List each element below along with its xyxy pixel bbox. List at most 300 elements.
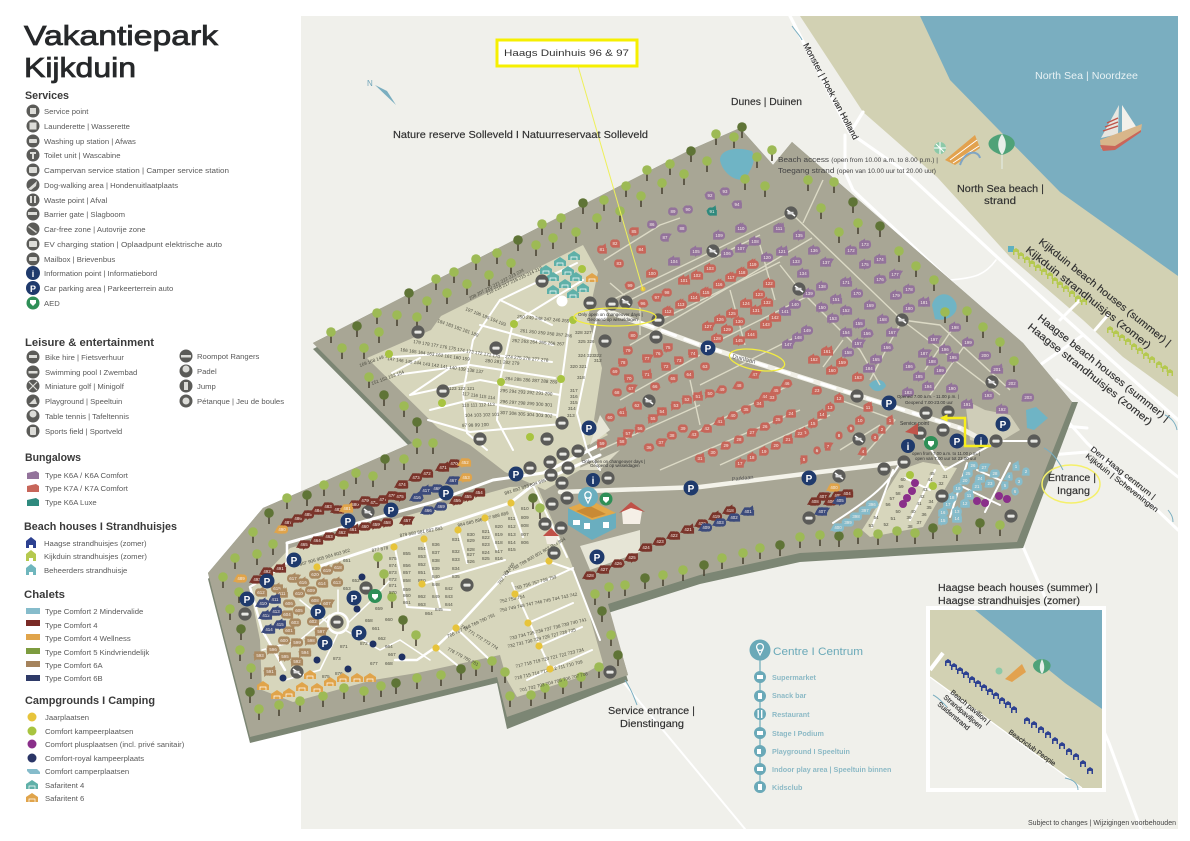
campsite numbers: south-west campground: 862 bbox=[418, 594, 426, 599]
parking and information markers: P bbox=[264, 577, 271, 588]
purple bungalows: Type K6A: 179 bbox=[892, 293, 900, 298]
red bungalows: Type K7A: 31 bbox=[698, 456, 703, 461]
red bungalows: Type K7A: 117 bbox=[728, 275, 735, 280]
light blue chalets: Type Comfort 2: 397 bbox=[861, 508, 869, 513]
light blue chalets: Type Comfort 2: 13 bbox=[955, 509, 960, 514]
campsite numbers: south-west campground: 667 bbox=[388, 652, 396, 657]
panel: park side wall bbox=[208, 134, 1072, 743]
red bungalows: Type K7A: 72 bbox=[664, 364, 669, 369]
campsite numbers: south-west campground: 658 bbox=[365, 618, 373, 623]
red bungalows: Type K7A: 85 bbox=[632, 229, 637, 234]
panel: services legend bbox=[25, 90, 229, 310]
inset: Haagse beach houses: Beach pavilion | bbox=[949, 689, 991, 726]
trees bbox=[218, 122, 1019, 720]
map labels: Service entrance | bbox=[608, 706, 695, 717]
navy chalets: Type Comfort 6B: 417 bbox=[422, 488, 430, 493]
campsite numbers: north-west campground: 261 260 259 258 257 256 bbox=[520, 328, 573, 339]
purple bungalows: Type K6A: 87 bbox=[663, 235, 668, 240]
red bungalows: Type K7A: 114 bbox=[690, 295, 698, 300]
panel: leisure legend: Padel bbox=[197, 367, 217, 376]
map small notes: Geopend op wisseldagen bbox=[587, 317, 638, 322]
campsite numbers: south-west campground: 811 bbox=[508, 516, 516, 521]
brown chalets: Type Comfort 4: 483 bbox=[324, 504, 332, 509]
campsite numbers: south-west campground: 848 bbox=[432, 582, 440, 587]
brown chalets: Type Comfort 4: 426 bbox=[614, 561, 622, 566]
red bungalows: Type K7A: 14 bbox=[820, 412, 825, 417]
purple bungalows: Type K6A: 186 bbox=[905, 364, 913, 369]
brown chalets: Type Comfort 4: 404 bbox=[843, 491, 851, 496]
red bungalows: Type K7A: 116 bbox=[716, 282, 723, 287]
light blue chalets: Type Comfort 2: 4 bbox=[1008, 474, 1011, 479]
tan chalets: Type Comfort 6A: 600 bbox=[280, 638, 288, 643]
map labels: Toegang strand (open van 10.00 uur tot 20.00 uur) bbox=[778, 166, 936, 175]
safari tents bbox=[257, 251, 598, 699]
tan chalets: Type Comfort 6A: 619 bbox=[323, 568, 331, 573]
brown chalets: Type Comfort 4: 484 bbox=[314, 508, 322, 513]
tan chalets: Type Comfort 6A: 595 bbox=[281, 654, 289, 659]
red bungalows: Type K7A: 129 bbox=[723, 327, 731, 332]
red bungalows: Type K7A: 80 bbox=[631, 333, 636, 338]
brown chalets: Type Comfort 4: 455 bbox=[464, 494, 472, 499]
brown chalets: Type Comfort 4: 425 bbox=[628, 555, 636, 560]
campsite numbers: south-west campground: 813 bbox=[508, 532, 516, 537]
red bungalows: Type K7A: 3 bbox=[874, 435, 877, 440]
brown chalets: Type Comfort 4: 463 bbox=[325, 534, 333, 539]
campsite numbers: south-west campground: 837 bbox=[432, 550, 440, 555]
beach houses: Kijkduin bbox=[1008, 246, 1173, 376]
red bungalows: Type K7A: 127 bbox=[704, 324, 712, 329]
panel: chalets legend: Chalets bbox=[24, 589, 65, 601]
campsite numbers: north-west campground: 250 249 248 247 246 255 bbox=[517, 314, 570, 324]
purple bungalows: Type K6A: 109 bbox=[715, 233, 723, 238]
panel: leisure legend: Playground | Speeltuin bbox=[45, 397, 122, 406]
red bungalows: Type K7A: 10 bbox=[858, 418, 863, 423]
campsite numbers: east campground: 42 bbox=[919, 494, 925, 499]
tan chalets: Type Comfort 6A: 602 bbox=[309, 619, 317, 624]
tan chalets: Type Comfort 6A: 601 bbox=[285, 628, 293, 633]
red bungalows: Type K7A: 47 bbox=[753, 372, 758, 377]
light blue chalets: Type Comfort 2: 5 bbox=[1004, 483, 1007, 488]
parking and information markers: P bbox=[886, 399, 893, 410]
campsite numbers: south-west campground: 836 bbox=[432, 542, 440, 547]
campsite numbers: south-west campground: 875 bbox=[389, 556, 397, 561]
campsite numbers: south-west campground: 849 bbox=[432, 594, 440, 599]
tan chalets: Type Comfort 6A: 592 bbox=[293, 659, 301, 664]
inset: Haagse beach houses bbox=[928, 608, 1104, 790]
purple bungalows: Type K6A: 155 bbox=[855, 321, 863, 326]
campsite numbers: east campground: 58 bbox=[895, 491, 901, 496]
light blue chalets: Type Comfort 2: 11 bbox=[967, 493, 972, 498]
campsite numbers: north-west campground: 179 178 177 176 175 174 173 172 171 170 bbox=[413, 339, 501, 359]
navy chalets: Type Comfort 6B: 466 bbox=[424, 508, 432, 513]
panel: leisure legend: Miniature golf | Minigolf bbox=[45, 382, 125, 391]
campsite numbers: south-west campground: 842 bbox=[445, 586, 453, 591]
light blue chalets: Type Comfort 2: 26 bbox=[971, 463, 976, 468]
red bungalows: Type K7A: 12 bbox=[837, 396, 842, 401]
campsite numbers: north-west campground: 262 263 264 265 266 267 bbox=[512, 338, 565, 347]
red bungalows: Type K7A: 102 bbox=[693, 273, 701, 278]
map labels: Subject to changes | Wijzigingen voorbehouden bbox=[1028, 820, 1176, 827]
navy chalets: Type Comfort 6B: 414 bbox=[265, 627, 273, 632]
campsite numbers: south-west campground: 806 bbox=[521, 540, 529, 545]
purple bungalows: Type K6A: 86 bbox=[650, 222, 655, 227]
panel: bungalows legend: Type K6A Luxe bbox=[45, 498, 97, 507]
red bungalows: Type K7A: 99 bbox=[628, 283, 633, 288]
purple bungalows: Type K6A: 185 bbox=[915, 374, 923, 379]
navy chalets: Type Comfort 6B: 469 bbox=[437, 504, 445, 509]
red bungalows: Type K7A: 128 bbox=[713, 336, 721, 341]
red bungalows: Type K7A: 126 bbox=[716, 317, 724, 322]
panel: beach bbox=[800, 16, 1178, 397]
panel: campgrounds legend: Safaritent 4 bbox=[45, 781, 85, 790]
red bungalows: Type K7A: 23 bbox=[815, 388, 820, 393]
red bungalows: Type K7A: 74 bbox=[691, 351, 696, 356]
campsite numbers: east campground: 40 bbox=[910, 509, 916, 514]
red bungalows: Type K7A: 77 bbox=[645, 356, 650, 361]
panel: beach houses legend: Beheerders strandhuisje bbox=[44, 566, 127, 575]
orange chalets: Type Comfort 4 Wellness: 452 bbox=[461, 460, 469, 465]
purple bungalows: Type K6A: 120 bbox=[763, 255, 771, 260]
red bungalows: Type K7A: 20 bbox=[774, 443, 779, 448]
map labels: Kijkduin beach houses (summer) | bbox=[1036, 237, 1173, 349]
campsite numbers: east campground: 32 bbox=[938, 481, 944, 486]
campsite numbers: south-west campground: 810 bbox=[521, 506, 529, 511]
brown chalets: Type Comfort 4: 456 bbox=[453, 498, 461, 503]
panel: chalets legend: Type Comfort 5 Kindvriendelijk bbox=[45, 648, 149, 657]
panel: services legend: Services bbox=[25, 90, 69, 102]
parking and information markers: P bbox=[322, 639, 329, 650]
parking and information markers: i bbox=[592, 476, 595, 487]
light blue chalets: Type Comfort 2: 15 bbox=[941, 518, 946, 523]
red bungalows: Type K7A: 27 bbox=[750, 430, 755, 435]
brown chalets: Type Comfort 4: 476 bbox=[388, 493, 396, 498]
map labels: Entrance | bbox=[1048, 473, 1096, 484]
panel: services legend: Barrier gate | Slagboom bbox=[44, 210, 125, 219]
parking and information markers: P bbox=[594, 553, 601, 564]
campsite numbers: south-west campground: 852 bbox=[418, 562, 426, 567]
panel: chalets legend: Type Comfort 4 bbox=[45, 621, 98, 630]
purple bungalows: Type K6A: 202 bbox=[1008, 381, 1016, 386]
panel: leisure legend: Bike hire | Fietsverhuur bbox=[45, 353, 124, 362]
campsite numbers: south-west campground: 855 bbox=[403, 551, 411, 556]
campsite numbers: north-west campground: 296 297 298 299 300 301 bbox=[500, 399, 553, 408]
brown chalets: Type Comfort 4: 406 bbox=[827, 499, 835, 504]
campsite numbers: south-west campground: 733 734 735 736 737 738 739 740 741 bbox=[509, 617, 588, 641]
campsite numbers: south-west campground: 755 756 757 758 759 bbox=[514, 574, 557, 591]
campsite numbers: south-west campground: 872 bbox=[360, 641, 368, 646]
campsite numbers: north-west campground bbox=[359, 265, 602, 428]
beach icons bbox=[934, 134, 1015, 169]
panel: beach houses legend bbox=[24, 521, 177, 575]
tan chalets: Type Comfort 6A: 615 bbox=[273, 586, 281, 591]
brown chalets: Type Comfort 4: 461 bbox=[349, 527, 357, 532]
direction arrows bbox=[625, 26, 1177, 705]
purple bungalows: Type K6A: 94 bbox=[735, 202, 740, 207]
panel: services legend: Mailbox | Brievenbus bbox=[44, 255, 115, 264]
campsite numbers: north-west campground: 274 275 276 277 278 bbox=[505, 354, 549, 363]
purple bungalows: Type K6A: 191 bbox=[963, 402, 971, 407]
brown chalets: Type Comfort 4: 457 bbox=[403, 518, 411, 523]
red bungalows: Type K7A: 161 bbox=[823, 349, 831, 354]
campsite numbers: east campground: 35 bbox=[926, 505, 932, 510]
red bungalows: Type K7A: 145 bbox=[735, 338, 743, 343]
light blue chalets: Type Comfort 2: 3 bbox=[1018, 479, 1021, 484]
purple bungalows: Type K6A: 175 bbox=[861, 262, 869, 267]
parking and information markers: P bbox=[345, 517, 352, 528]
campsite numbers: south-west campground: 863 bbox=[418, 602, 426, 607]
purple bungalows: Type K6A: 181 bbox=[920, 300, 928, 305]
light blue chalets: Type Comfort 2: 2 bbox=[1025, 469, 1028, 474]
campsite numbers: east campground: 56 bbox=[885, 502, 891, 507]
tan chalets: Type Comfort 6A: 620 bbox=[311, 572, 319, 577]
navy chalets: Type Comfort 6B: 407 bbox=[818, 509, 826, 514]
campsite numbers: south-west campground: 716 715 714 713 712 711 710 709 bbox=[514, 659, 584, 681]
purple bungalows: Type K6A: 156 bbox=[863, 331, 871, 336]
campsite numbers: north-west campground: 315 bbox=[570, 400, 578, 405]
campsite numbers: north-west campground: 280 281 282 279 bbox=[485, 358, 520, 366]
campsite numbers: south-west campground: 732 731 730 729 728 727 726 725 bbox=[507, 627, 577, 649]
panel: centre legend bbox=[750, 640, 891, 793]
light blue chalets: Type Comfort 2: 12 bbox=[963, 501, 968, 506]
navy chalets: Type Comfort 6B: 405 bbox=[836, 498, 844, 503]
red bungalows: Type K7A: 163 bbox=[854, 375, 862, 380]
panel: centre legend: Centre I Centrum bbox=[773, 646, 863, 658]
campsite numbers: east campground: 31 bbox=[942, 474, 948, 479]
purple bungalows: Type K6A: 169 bbox=[866, 303, 874, 308]
campsite numbers: south-west campground: 652 bbox=[352, 578, 360, 583]
campsite numbers: south-west campground: 717 718 719 720 721 722 723 724 bbox=[515, 647, 585, 669]
campsite numbers: south-west campground: 827 bbox=[467, 552, 475, 557]
purple bungalows: Type K6A: 187 bbox=[920, 351, 928, 356]
brown chalets: Type Comfort 4: 419 bbox=[712, 514, 720, 519]
light blue chalets: Type Comfort 2: 27 bbox=[982, 465, 987, 470]
panel: chalets legend: Type Comfort 6A bbox=[45, 661, 104, 670]
map labels: Haagse beach houses (summer) | bbox=[938, 583, 1098, 594]
red bungalows: Type K7A: 57 bbox=[626, 431, 631, 436]
campsite numbers: south-west campground: 659 bbox=[375, 606, 383, 611]
map labels: strand bbox=[984, 196, 1016, 207]
campsite numbers: south-west campground: 854 bbox=[418, 546, 426, 551]
light blue chalets: Type Comfort 2: 23 bbox=[988, 481, 993, 486]
red bungalows: Type K7A: 42 bbox=[705, 426, 710, 431]
purple bungalows: Type K6A: 170 bbox=[853, 291, 861, 296]
campsite numbers: north-west campground: 151 152 153 154 bbox=[371, 369, 405, 386]
panel: campgrounds legend: Comfort camperplaatsen bbox=[45, 767, 129, 776]
campsite numbers: north-west campground: 324 323 bbox=[578, 353, 595, 358]
light blue chalets: Type Comfort 2: 399 bbox=[844, 520, 852, 525]
campsite numbers: south-west campground: 876 bbox=[335, 671, 343, 676]
red bungalows: Type K7A: 130 bbox=[735, 319, 743, 324]
campsite numbers: north-west campground: 307 306 305 304 303 302 bbox=[500, 410, 553, 419]
panel: services legend: Washing up station | Afwas bbox=[44, 137, 136, 146]
parking and information markers: i bbox=[907, 442, 910, 453]
red bungalows: Type K7A: 29 bbox=[724, 443, 729, 448]
brown chalets: Type Comfort 4: 424 bbox=[642, 545, 650, 550]
red bungalows: Type K7A: 73 bbox=[677, 358, 682, 363]
panel: centre legend: Supermarket bbox=[772, 673, 817, 682]
purple bungalows: Type K6A: 166 bbox=[883, 345, 891, 350]
campsite numbers: north-west campground: 284 285 286 287 288 289 bbox=[505, 376, 558, 385]
tan chalets: Type Comfort 6A: 606 bbox=[285, 601, 293, 606]
brown chalets: Type Comfort 4: 421 bbox=[684, 527, 692, 532]
brown chalets: Type Comfort 4: 428 bbox=[586, 573, 594, 578]
red bungalows: Type K7A: 83 bbox=[617, 261, 622, 266]
red bungalows: Type K7A: 124 bbox=[742, 301, 750, 306]
red bungalows: Type K7A: 63 bbox=[703, 364, 708, 369]
map labels: Dienstingang bbox=[620, 719, 684, 730]
purple bungalows: Type K6A: 176 bbox=[876, 277, 884, 282]
panel: campgrounds legend: Comfort-royal kampeerplaats bbox=[45, 754, 144, 763]
navy chalets: Type Comfort 6B: 402 bbox=[730, 515, 738, 520]
map small notes: open from 7.00 a.m. to 11.00 p.m. | bbox=[912, 451, 980, 456]
navy chalets: Type Comfort 6B: 416 bbox=[413, 495, 421, 500]
brown chalets: Type Comfort 4: 491 bbox=[276, 566, 284, 571]
campsite numbers: south-west campground: 820 bbox=[495, 524, 503, 529]
red bungalows: Type K7A: 21 bbox=[786, 437, 791, 442]
purple bungalows: Type K6A: 188 bbox=[928, 359, 936, 364]
campsite numbers: south-west campground: 859 bbox=[403, 587, 411, 592]
red bungalows: Type K7A: 100 bbox=[648, 271, 656, 276]
brown chalets: Type Comfort 4: 462 bbox=[338, 530, 346, 535]
purple bungalows: Type K6A: 201 bbox=[993, 367, 1001, 372]
campsite numbers: north-west campground: 313 bbox=[567, 413, 575, 418]
navy chalets: Type Comfort 6B: 401 bbox=[744, 509, 752, 514]
purple bungalows: Type K6A: 106 bbox=[723, 251, 731, 256]
brown chalets: Type Comfort 4: 464 bbox=[313, 538, 321, 543]
panel: bungalows legend: Bungalows bbox=[25, 452, 81, 464]
panel: services legend: Car-free zone | Autovrije zone bbox=[44, 225, 146, 234]
orange chalets: Type Comfort 4 Wellness: 453 bbox=[462, 475, 470, 480]
red bungalows: Type K7A: 97 bbox=[655, 295, 660, 300]
campsite numbers: south-west campground: 807 bbox=[521, 532, 529, 537]
light blue chalets: Type Comfort 2: 400 bbox=[834, 525, 842, 530]
orange chalets: Type Comfort 4 Wellness: 400 bbox=[830, 485, 838, 490]
tan chalets: Type Comfort 6A: 617 bbox=[289, 576, 297, 581]
tan chalets: Type Comfort 6A: 614 bbox=[318, 581, 326, 586]
panel: services legend: Toilet unit | Wascabine bbox=[44, 151, 120, 160]
tan chalets: Type Comfort 6A: 594 bbox=[301, 650, 309, 655]
campsite numbers: south-west campground: 809 bbox=[521, 515, 529, 520]
panel: centre legend: Snack bar bbox=[772, 691, 807, 700]
brown chalets: Type Comfort 4: 472 bbox=[423, 471, 431, 476]
campsite numbers: east campground: 41 bbox=[916, 501, 922, 506]
red bungalows: Type K7A: 61 bbox=[620, 410, 625, 415]
tan chalets: Type Comfort 6A: 616 bbox=[299, 580, 307, 585]
brown chalets: Type Comfort 4: 475 bbox=[396, 494, 404, 499]
light blue chalets: Type Comfort 2: 28 bbox=[993, 471, 998, 476]
map labels bbox=[393, 41, 1176, 827]
purple bungalows: Type K6A: 153 bbox=[829, 316, 837, 321]
map labels: Dunes | Duinen bbox=[731, 97, 802, 108]
centre building bbox=[543, 423, 918, 544]
purple bungalows: Type K6A: 183 bbox=[904, 390, 912, 395]
panel: centre legend: Playground I Speeltuin bbox=[772, 747, 850, 756]
campsite numbers: north-west campground: 169 168 149 148 bbox=[359, 351, 393, 368]
callout: Haags Duinhuis: Haags Duinhuis 96 & 97 bbox=[504, 48, 629, 59]
brown chalets: Type Comfort 4: 492 bbox=[263, 569, 271, 574]
purple bungalows: Type K6A: 93 bbox=[723, 189, 728, 194]
tan chalets: Type Comfort 6A: 618 bbox=[334, 565, 342, 570]
light blue chalets: Type Comfort 2: 17 bbox=[946, 502, 951, 507]
orange chalets: Type Comfort 4 Wellness: 490 bbox=[278, 527, 286, 532]
panel: bungalows legend bbox=[25, 452, 129, 507]
campsite numbers: east campground: 45 bbox=[929, 471, 935, 476]
campsite numbers: south-west campground: 873 bbox=[389, 570, 397, 575]
purple bungalows: Type K6A: 203 bbox=[1024, 395, 1032, 400]
campsite numbers: south-west campground: 812 bbox=[508, 524, 516, 529]
campsite numbers: south-west campground: 825 bbox=[482, 556, 490, 561]
purple bungalows: Type K6A: 92 bbox=[708, 193, 713, 198]
red bungalows: Type K7A: 52 bbox=[685, 397, 690, 402]
panel: beach houses legend: Beach houses I Strandhuisjes bbox=[24, 521, 177, 533]
parking and information markers: P bbox=[244, 595, 251, 606]
campsite numbers: east campground: 54 bbox=[873, 515, 879, 520]
map background bbox=[301, 16, 1178, 829]
red bungalows: Type K7A: 45 bbox=[774, 388, 779, 393]
campground pitch markers bbox=[280, 265, 1011, 682]
campsite numbers: south-west campground: 661 bbox=[372, 626, 380, 631]
purple bungalows: Type K6A: 136 bbox=[810, 248, 818, 253]
orange chalets: Type Comfort 4 Wellness: 481 bbox=[343, 506, 351, 511]
panel: campgrounds legend: Safaritent 6 bbox=[45, 794, 84, 803]
panel: services legend: AED bbox=[44, 299, 60, 308]
inset: Haagse beach houses: Strandpaviljoen bbox=[942, 694, 983, 731]
inset: Haagse beach houses: Beachclub Peopie bbox=[1007, 729, 1057, 768]
campsite numbers: south-west campground: 653 bbox=[343, 586, 351, 591]
red bungalows: Type K7A: 51 bbox=[696, 394, 701, 399]
campsite numbers: south-west campground: 662 bbox=[378, 636, 386, 641]
red bungalows: Type K7A: 123 bbox=[755, 292, 763, 297]
campsite numbers: east campground bbox=[868, 471, 948, 529]
campsite numbers: south-west campground: 770 771 772 773 774 bbox=[459, 624, 499, 651]
light blue chalets: Type Comfort 2: 20 bbox=[963, 478, 968, 483]
campsite numbers: south-west campground: 834 bbox=[452, 566, 460, 571]
campsite numbers: south-west campground: 833 bbox=[452, 557, 460, 562]
purple bungalows: Type K6A: 152 bbox=[842, 308, 850, 313]
brown chalets: Type Comfort 4: 474 bbox=[398, 482, 406, 487]
red bungalows: Type K7A: 65 bbox=[671, 376, 676, 381]
red bungalows: Type K7A: 25 bbox=[776, 417, 781, 422]
parking and information markers: P bbox=[356, 629, 363, 640]
panel: services legend: Waste point | Afval bbox=[44, 196, 108, 205]
campsite numbers: south-west campground: 891 892 893 894 895 bbox=[504, 478, 547, 496]
panel: leisure legend: Leisure & entertainment bbox=[25, 337, 154, 349]
map labels: Den Haag centrum | bbox=[1089, 444, 1157, 501]
red bungalows: Type K7A: 50 bbox=[708, 391, 713, 396]
campsite numbers: south-west campground: 835 bbox=[452, 574, 460, 579]
purple bungalows: Type K6A: 139 bbox=[805, 291, 813, 296]
campsite numbers: south-west campground: 832 bbox=[452, 549, 460, 554]
light blue chalets: Type Comfort 2: 16 bbox=[941, 510, 946, 515]
purple bungalows: Type K6A: 178 bbox=[905, 287, 913, 292]
navy chalets: Type Comfort 6B: 468 bbox=[433, 486, 441, 491]
light blue chalets: Type Comfort 2: 24 bbox=[978, 476, 983, 481]
campsite numbers: south-west campground: 856 bbox=[403, 563, 411, 568]
campsite numbers: north-west campground: 124 123 122 121 bbox=[440, 386, 475, 391]
brown chalets: Type Comfort 4: 471 bbox=[439, 465, 447, 470]
red bungalows: Type K7A: 5 bbox=[803, 457, 806, 462]
red bungalows: Type K7A: 8 bbox=[838, 433, 841, 438]
campsite numbers: south-west campground: 762 761 760 bbox=[497, 561, 516, 586]
campsite numbers: south-west campground: 664 bbox=[385, 644, 393, 649]
title: Vakantiepark bbox=[24, 20, 219, 51]
campsite numbers: south-west campground: 815 bbox=[508, 547, 516, 552]
panel: services legend: Information point | Informatiebord bbox=[44, 269, 157, 278]
red bungalows: Type K7A: 112 bbox=[664, 309, 672, 314]
parking and information markers bbox=[240, 340, 1010, 650]
campsite numbers: north-west campground: 325 326 bbox=[578, 339, 595, 344]
campsite numbers: north-west campground: 197 196 195 194 193 bbox=[465, 306, 507, 327]
